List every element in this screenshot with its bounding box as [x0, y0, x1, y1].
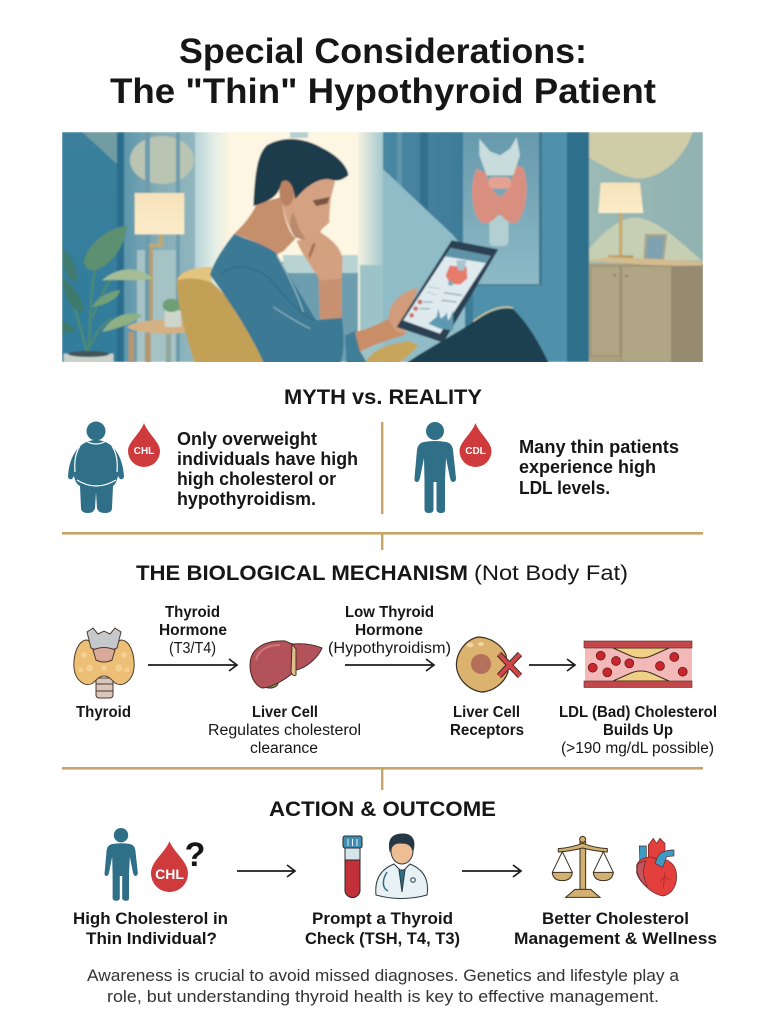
arrow: liver to receptors — [345, 659, 434, 671]
face — [280, 175, 335, 243]
label: thyroid hormone T3/T4: Hormone — [159, 622, 227, 639]
text: myth statement: Only overweight — [177, 429, 317, 449]
footer note — [87, 967, 680, 1006]
heading: myth vs reality: MYTH vs. REALITY — [284, 386, 482, 409]
arrow: to thyroid check — [237, 865, 295, 877]
heading: the biological mechanism: THE BIOLOGICAL MECHANISM — [136, 562, 468, 585]
label: LDL builds up: (>190 mg/dL possible) — [561, 740, 714, 757]
title: The "Thin" Hypothyroid Patient — [110, 72, 656, 111]
label: high cholesterol in thin individual: Thin Individual? — [86, 929, 217, 948]
icon: thin person with question: ? — [185, 836, 205, 874]
icon: thyroid gland — [74, 628, 134, 698]
label: liver cell: Regulates cholesterol — [208, 722, 361, 739]
heading: action and outcome: ACTION & OUTCOME — [269, 798, 496, 821]
label: low thyroid hormone: Low Thyroid — [345, 604, 434, 621]
illustration: man reading thyroid results on a tablet — [62, 132, 703, 365]
footer note: role, but understanding thyroid health is key to effective management. — [107, 988, 659, 1006]
trousers — [403, 308, 550, 365]
text: reality statement: experience high — [519, 457, 656, 477]
label: better cholesterol management — [514, 909, 717, 948]
icon: thin person — [414, 422, 456, 513]
plant — [62, 225, 154, 364]
label: low thyroid hormone: (Hypothyroidism) — [328, 640, 451, 657]
icon: liver — [250, 641, 322, 688]
label: liver cell receptors: Liver Cell — [453, 704, 520, 721]
armchair seat — [365, 340, 418, 362]
label: liver cell receptors — [450, 704, 524, 739]
label: thyroid: Thyroid — [76, 704, 131, 721]
arrow: receptors to LDL build-up — [529, 659, 575, 671]
icon: blood drop CHL — [128, 423, 160, 467]
label: liver cell receptors: Receptors — [450, 722, 524, 739]
poster: thyroid anatomy — [463, 132, 542, 286]
room lamp glow — [589, 132, 703, 364]
icon: thin person with question — [105, 828, 205, 901]
arrow: to better management — [462, 865, 521, 877]
label: LDL builds up: LDL (Bad) Cholesterol — [559, 704, 717, 721]
tablet device — [397, 240, 498, 343]
neck — [234, 197, 296, 255]
label: prompt a thyroid check — [305, 909, 460, 948]
label: liver cell: Liver Cell — [252, 704, 318, 721]
icon: doctor — [376, 834, 428, 898]
label: high cholesterol in thin individual: High Cholesterol in — [73, 909, 228, 928]
text: myth statement: hypothyroidism. — [177, 489, 316, 509]
label: prompt a thyroid check: Check (TSH, T4, T3) — [305, 929, 460, 948]
man with tablet — [210, 139, 550, 365]
label: better cholesterol management: Management & Wellness — [514, 929, 717, 948]
label: LDL builds up — [559, 704, 717, 757]
label: liver cell: clearance — [250, 740, 318, 757]
flow: biological mechanism — [74, 604, 717, 757]
side table — [127, 299, 187, 364]
shirt — [210, 234, 344, 365]
heading: the biological mechanism: (Not Body Fat) — [474, 562, 628, 585]
icon: balance scales — [552, 836, 613, 897]
icon: liver cell with blocked receptor — [456, 637, 520, 692]
raised hand and forearm — [318, 275, 342, 319]
text: myth statement: individuals have high — [177, 449, 358, 469]
text: reality statement — [519, 437, 679, 498]
panel: reality — [414, 422, 679, 513]
label: low thyroid hormone: Hormone — [355, 622, 423, 639]
arrow: thyroid to liver — [148, 659, 237, 671]
icon: overweight person — [68, 422, 124, 513]
label: thyroid hormone T3/T4: (T3/T4) — [169, 640, 216, 657]
picture frame — [643, 234, 667, 261]
floor lamp — [135, 193, 184, 320]
flow: action and outcome — [73, 828, 717, 948]
icon: thin person with question: CHL — [155, 866, 184, 882]
right lamp — [598, 183, 643, 259]
icon: blood drop CDL: CDL — [465, 446, 486, 457]
icon: blood drop CHL: CHL — [134, 446, 154, 457]
left side room details — [62, 193, 266, 365]
text: reality statement: Many thin patients — [519, 437, 679, 457]
label: LDL builds up: Builds Up — [603, 722, 673, 739]
text: myth statement: high cholesterol or — [177, 469, 336, 489]
text: myth statement — [177, 429, 358, 509]
armchair back — [177, 267, 266, 365]
label: low thyroid hormone — [328, 604, 451, 657]
icon: heart — [637, 838, 677, 896]
arm holding tablet — [355, 319, 407, 352]
hair — [253, 139, 348, 206]
footer note: Awareness is crucial to avoid missed diagnoses. Genetics and lifestyle play a — [87, 967, 680, 985]
label: thyroid hormone T3/T4 — [159, 604, 227, 657]
title: Special Considerations: — [179, 32, 587, 71]
sleeve — [344, 330, 368, 362]
label: thyroid hormone T3/T4: Thyroid — [165, 604, 220, 621]
panel: myth — [68, 422, 358, 513]
icon: artery with plaque — [584, 641, 692, 688]
label: prompt a thyroid check: Prompt a Thyroid — [312, 909, 453, 928]
icon: blood test tube — [343, 836, 362, 898]
text: reality statement: LDL levels. — [519, 478, 610, 498]
cabinet — [589, 257, 703, 364]
title — [110, 32, 656, 111]
label: liver cell — [208, 704, 361, 757]
label: better cholesterol management: Better Cholesterol — [542, 909, 689, 928]
ear — [279, 178, 294, 206]
heading: the biological mechanism — [136, 562, 628, 585]
icon: blood drop CDL — [460, 423, 492, 467]
label: high cholesterol in thin individual — [73, 909, 228, 948]
